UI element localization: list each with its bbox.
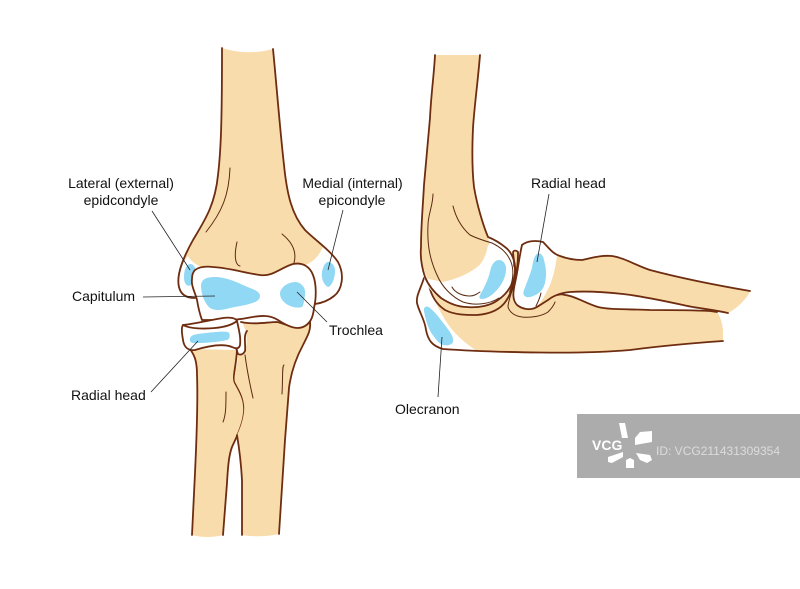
leader line: lateral epicondyle [152,211,190,270]
icon: trochlea cartilage [280,282,305,308]
radius side view [513,241,750,313]
watermark [577,414,800,478]
panel: side view of elbow [417,55,750,353]
humerus shaft and condyles [178,48,342,304]
label: medial epicondyle: Medial (internal) [302,175,403,191]
leader line: radial head front [151,341,198,392]
label: epidcondyle: epidcondyle [84,192,159,208]
radial head front view [182,318,240,350]
ulna bone front view [235,322,310,536]
icon: capitulum cartilage [201,277,260,310]
panel: front view of elbow [178,48,342,537]
leader line: radial head side [537,194,549,262]
leader line: capitulum [143,296,215,297]
label: radial head side: Radial head [531,175,606,191]
label: radial head front: Radial head [71,387,146,403]
label: trochlea: Trochlea [329,322,383,338]
icon: watermark logo [608,423,652,468]
label: olecranon: Olecranon [395,401,460,417]
leader line: olecranon [438,337,442,397]
humerus side view [421,55,515,307]
watermark id: ID: VCG211431309354 [656,444,780,458]
leader line: trochlea [297,292,327,322]
label: epicondyle: epicondyle [319,192,386,208]
label: lateral epicondyle: Lateral (external) [68,175,174,191]
icon: radial head cartilage [190,332,230,343]
icon: radial head cartilage side view [523,253,546,297]
capitulum and trochlea articular surface [192,264,316,328]
icon: olecranon cartilage [424,307,453,345]
icon: humeral condyle cartilage [479,260,506,299]
label: capitulum: Capitulum [72,288,135,304]
watermark logo text: VCG [592,437,622,453]
icon: medial epicondyle cartilage [322,262,335,287]
leader line: medial epicondyle [328,210,343,270]
radius bone front view [190,349,244,537]
ulna side view [417,251,723,353]
icon: lateral epicondyle cartilage [184,264,195,286]
